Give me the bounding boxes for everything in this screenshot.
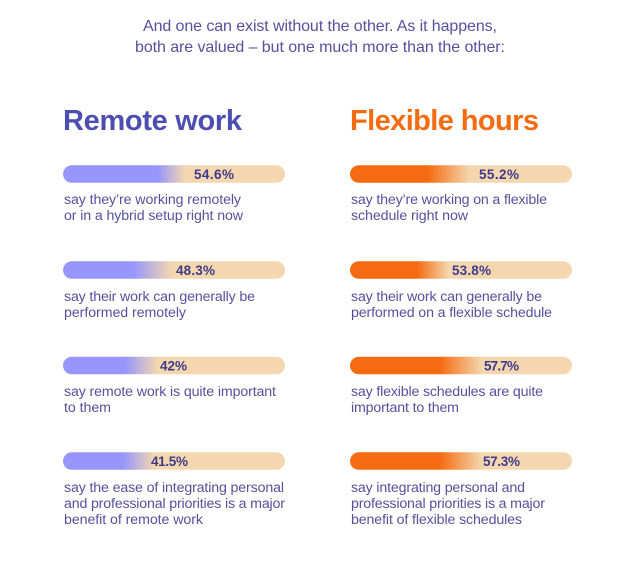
stat: flexible 57.3%: 57.3% (483, 454, 520, 469)
stat: remote 48.3%: 48.3% (176, 263, 215, 278)
stat: flexible 55.2% (350, 165, 572, 224)
stat: flexible 53.8%: say their work can generally be (351, 289, 542, 305)
stat: flexible 57.7%: 57.7% (484, 358, 519, 374)
stat: flexible 57.7%: say flexible schedules are quite (351, 384, 543, 400)
stat: flexible 55.2%: say they’re working on a flexible (351, 192, 547, 208)
stat: remote 48.3%: performed remotely (64, 305, 187, 321)
stat: remote 42%: 42% (160, 358, 187, 374)
panel: flexible hours (350, 105, 572, 528)
stat: flexible 53.8% (350, 261, 572, 321)
stat: remote 54.6%: or in a hybrid setup right now (64, 208, 244, 224)
stat: flexible 55.2%: schedule right now (351, 208, 469, 224)
stat: flexible 57.3%: say integrating personal and (351, 480, 525, 496)
stat: remote 41.5%: benefit of remote work (64, 512, 204, 528)
panel: remote work (63, 105, 285, 528)
intro text: And one can exist without the other. As it happens, (143, 18, 497, 35)
heading: remote work: Remote work (63, 105, 243, 137)
stat: remote 41.5%: say the ease of integrating personal (64, 480, 284, 496)
stat: flexible 57.7%: important to them (351, 400, 459, 416)
stat: remote 54.6% (63, 165, 285, 224)
stat: remote 54.6%: say they’re working remotely (64, 192, 242, 208)
stat: remote 42%: say remote work is quite important (64, 384, 276, 400)
stat: flexible 55.2%: 55.2% (479, 167, 519, 182)
stat: flexible 57.3% (350, 452, 572, 528)
stat: remote 42%: to them (64, 400, 111, 416)
stat: remote 48.3% (63, 261, 285, 321)
stat: remote 54.6%: 54.6% (194, 167, 234, 182)
intro text: both are valued – but one much more than the other: (135, 39, 505, 56)
stat: flexible 53.8%: performed on a flexible schedule (351, 305, 552, 321)
heading: flexible hours: Flexible hours (350, 105, 539, 137)
stat: flexible 53.8%: 53.8% (452, 263, 491, 278)
stat: flexible 57.3%: professional priorities is a major (351, 496, 545, 512)
stat: remote 42% (63, 357, 285, 416)
stat: flexible 57.3%: benefit of flexible schedules (351, 512, 522, 528)
stat: remote 48.3%: say their work can generally be (64, 289, 255, 305)
stat: remote 41.5%: 41.5% (151, 454, 188, 469)
stat: remote 41.5% (63, 452, 285, 528)
stat: flexible 57.7% (350, 357, 572, 416)
stat: remote 41.5%: and professional priorities is a major (64, 496, 285, 512)
intro text (135, 18, 505, 56)
